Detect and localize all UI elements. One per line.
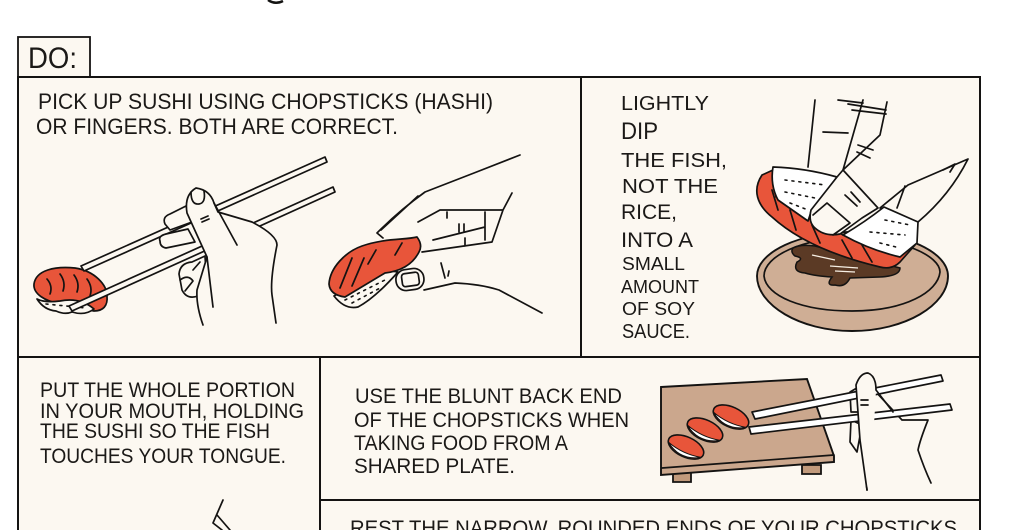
panel text: whole portion: IN YOUR MOUTH, HOLDING xyxy=(40,400,304,423)
panel text: blunt back end: TAKING FOOD FROM A xyxy=(354,432,568,455)
panel: pick up sushi xyxy=(34,89,542,325)
panel text: whole portion: PUT THE WHOLE PORTION xyxy=(40,379,295,402)
panel text: whole portion: TOUCHES YOUR TONGUE. xyxy=(40,445,286,468)
illustration: top of face outline xyxy=(213,500,230,530)
panel text: lightly dip: SMALL xyxy=(622,254,685,274)
heading tab: DO xyxy=(18,37,90,77)
panel text: lightly dip: DIP xyxy=(621,118,658,145)
panel text: pick up sushi: OR FINGERS. BOTH ARE CORRECT. xyxy=(36,114,398,139)
panel text: blunt back end: USE THE BLUNT BACK END xyxy=(355,385,622,408)
illustration: fingers holding sushi xyxy=(329,155,542,313)
panel text: whole portion xyxy=(40,379,304,468)
panel text: lightly dip xyxy=(621,93,727,343)
panel text: lightly dip: SAUCE. xyxy=(622,321,690,343)
illustration: dipping sushi in soy sauce xyxy=(757,100,968,331)
panel: blunt back end xyxy=(354,373,952,490)
panel: whole portion xyxy=(40,379,304,530)
panel text: blunt back end xyxy=(354,385,629,478)
panel: lightly dip xyxy=(621,93,968,343)
panel text: lightly dip: INTO A xyxy=(621,229,693,252)
panel text: lightly dip: RICE, xyxy=(621,201,677,224)
panel text: blunt back end: SHARED PLATE. xyxy=(354,455,515,478)
panel text: pick up sushi xyxy=(36,89,493,139)
panel text: lightly dip: LIGHTLY xyxy=(621,93,709,115)
panel text: lightly dip: AMOUNT xyxy=(621,277,699,297)
illustration: hand holding sushi with chopsticks xyxy=(34,157,335,325)
panel text: whole portion: THE SUSHI SO THE FISH xyxy=(40,420,270,443)
panel text: lightly dip: OF SOY xyxy=(622,299,695,319)
panel text: pick up sushi: PICK UP SUSHI USING CHOPSTICKS (HASHI) xyxy=(38,89,493,114)
clipped descender from the title above xyxy=(268,0,283,3)
panel text: blunt back end: OF THE CHOPSTICKS WHEN xyxy=(354,409,629,432)
illustration: shared plate and chopsticks xyxy=(661,373,952,490)
panel text: lightly dip: NOT THE xyxy=(622,176,718,198)
heading tab: DO: DO: xyxy=(28,42,77,75)
panel text: lightly dip: THE FISH, xyxy=(621,150,727,172)
